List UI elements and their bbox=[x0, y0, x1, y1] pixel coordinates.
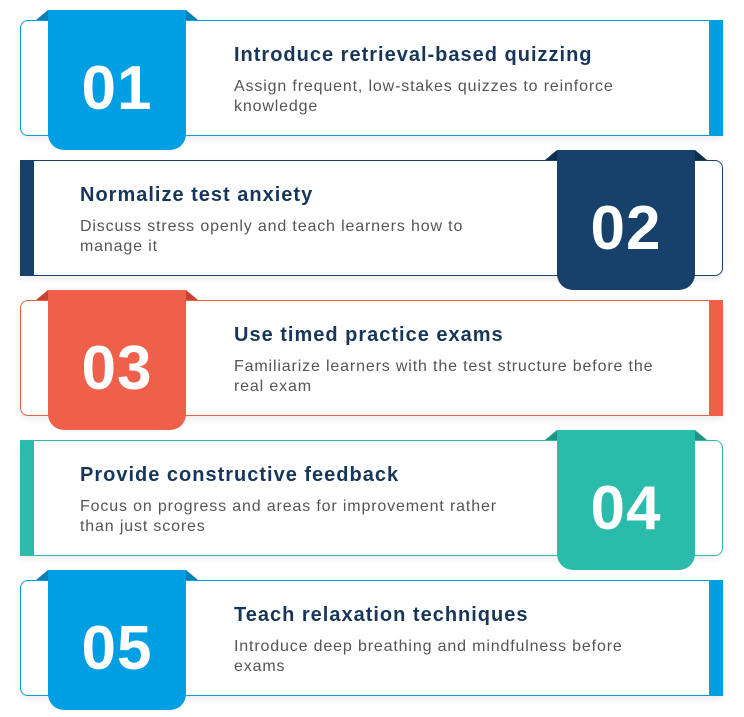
tab 03: 03 bbox=[82, 334, 152, 402]
desc 1 bbox=[234, 78, 614, 115]
tab 04: 04 bbox=[591, 474, 661, 542]
tab 01 bbox=[48, 10, 186, 150]
desc 3 bbox=[234, 358, 653, 395]
desc 5 bbox=[234, 638, 623, 675]
desc 1: Assign frequent, low-stakes quizzes to reinforce bbox=[234, 78, 614, 95]
title 4: Provide constructive feedback bbox=[80, 464, 399, 486]
tab 03 bbox=[48, 290, 186, 430]
desc 5: Introduce deep breathing and mindfulness before bbox=[234, 638, 623, 655]
desc 5: exams bbox=[234, 658, 285, 675]
item 3 bbox=[20, 290, 724, 430]
item 4 bbox=[20, 430, 724, 570]
title 3: Use timed practice exams bbox=[234, 324, 504, 346]
desc 2: Discuss stress openly and teach learners how to bbox=[80, 218, 463, 235]
tab 01: 01 bbox=[82, 54, 152, 122]
item 1 bbox=[20, 10, 724, 150]
desc 2: manage it bbox=[80, 238, 158, 255]
desc 2 bbox=[80, 218, 463, 255]
title 5: Teach relaxation techniques bbox=[234, 604, 528, 626]
title 2: Normalize test anxiety bbox=[80, 184, 313, 206]
tab 04 bbox=[557, 430, 695, 570]
tab 05 bbox=[48, 570, 186, 710]
desc 4 bbox=[80, 498, 497, 535]
desc 4: than just scores bbox=[80, 518, 206, 535]
desc 1: knowledge bbox=[234, 98, 318, 115]
desc 3: Familiarize learners with the test structure before the bbox=[234, 358, 653, 375]
title 1: Introduce retrieval-based quizzing bbox=[234, 44, 593, 66]
tab 05: 05 bbox=[82, 614, 152, 682]
item 5 bbox=[20, 570, 724, 710]
desc 3: real exam bbox=[234, 378, 312, 395]
item 2 bbox=[20, 150, 724, 290]
tab 02: 02 bbox=[591, 194, 661, 262]
desc 4: Focus on progress and areas for improvement rather bbox=[80, 498, 497, 515]
tab 02 bbox=[557, 150, 695, 290]
